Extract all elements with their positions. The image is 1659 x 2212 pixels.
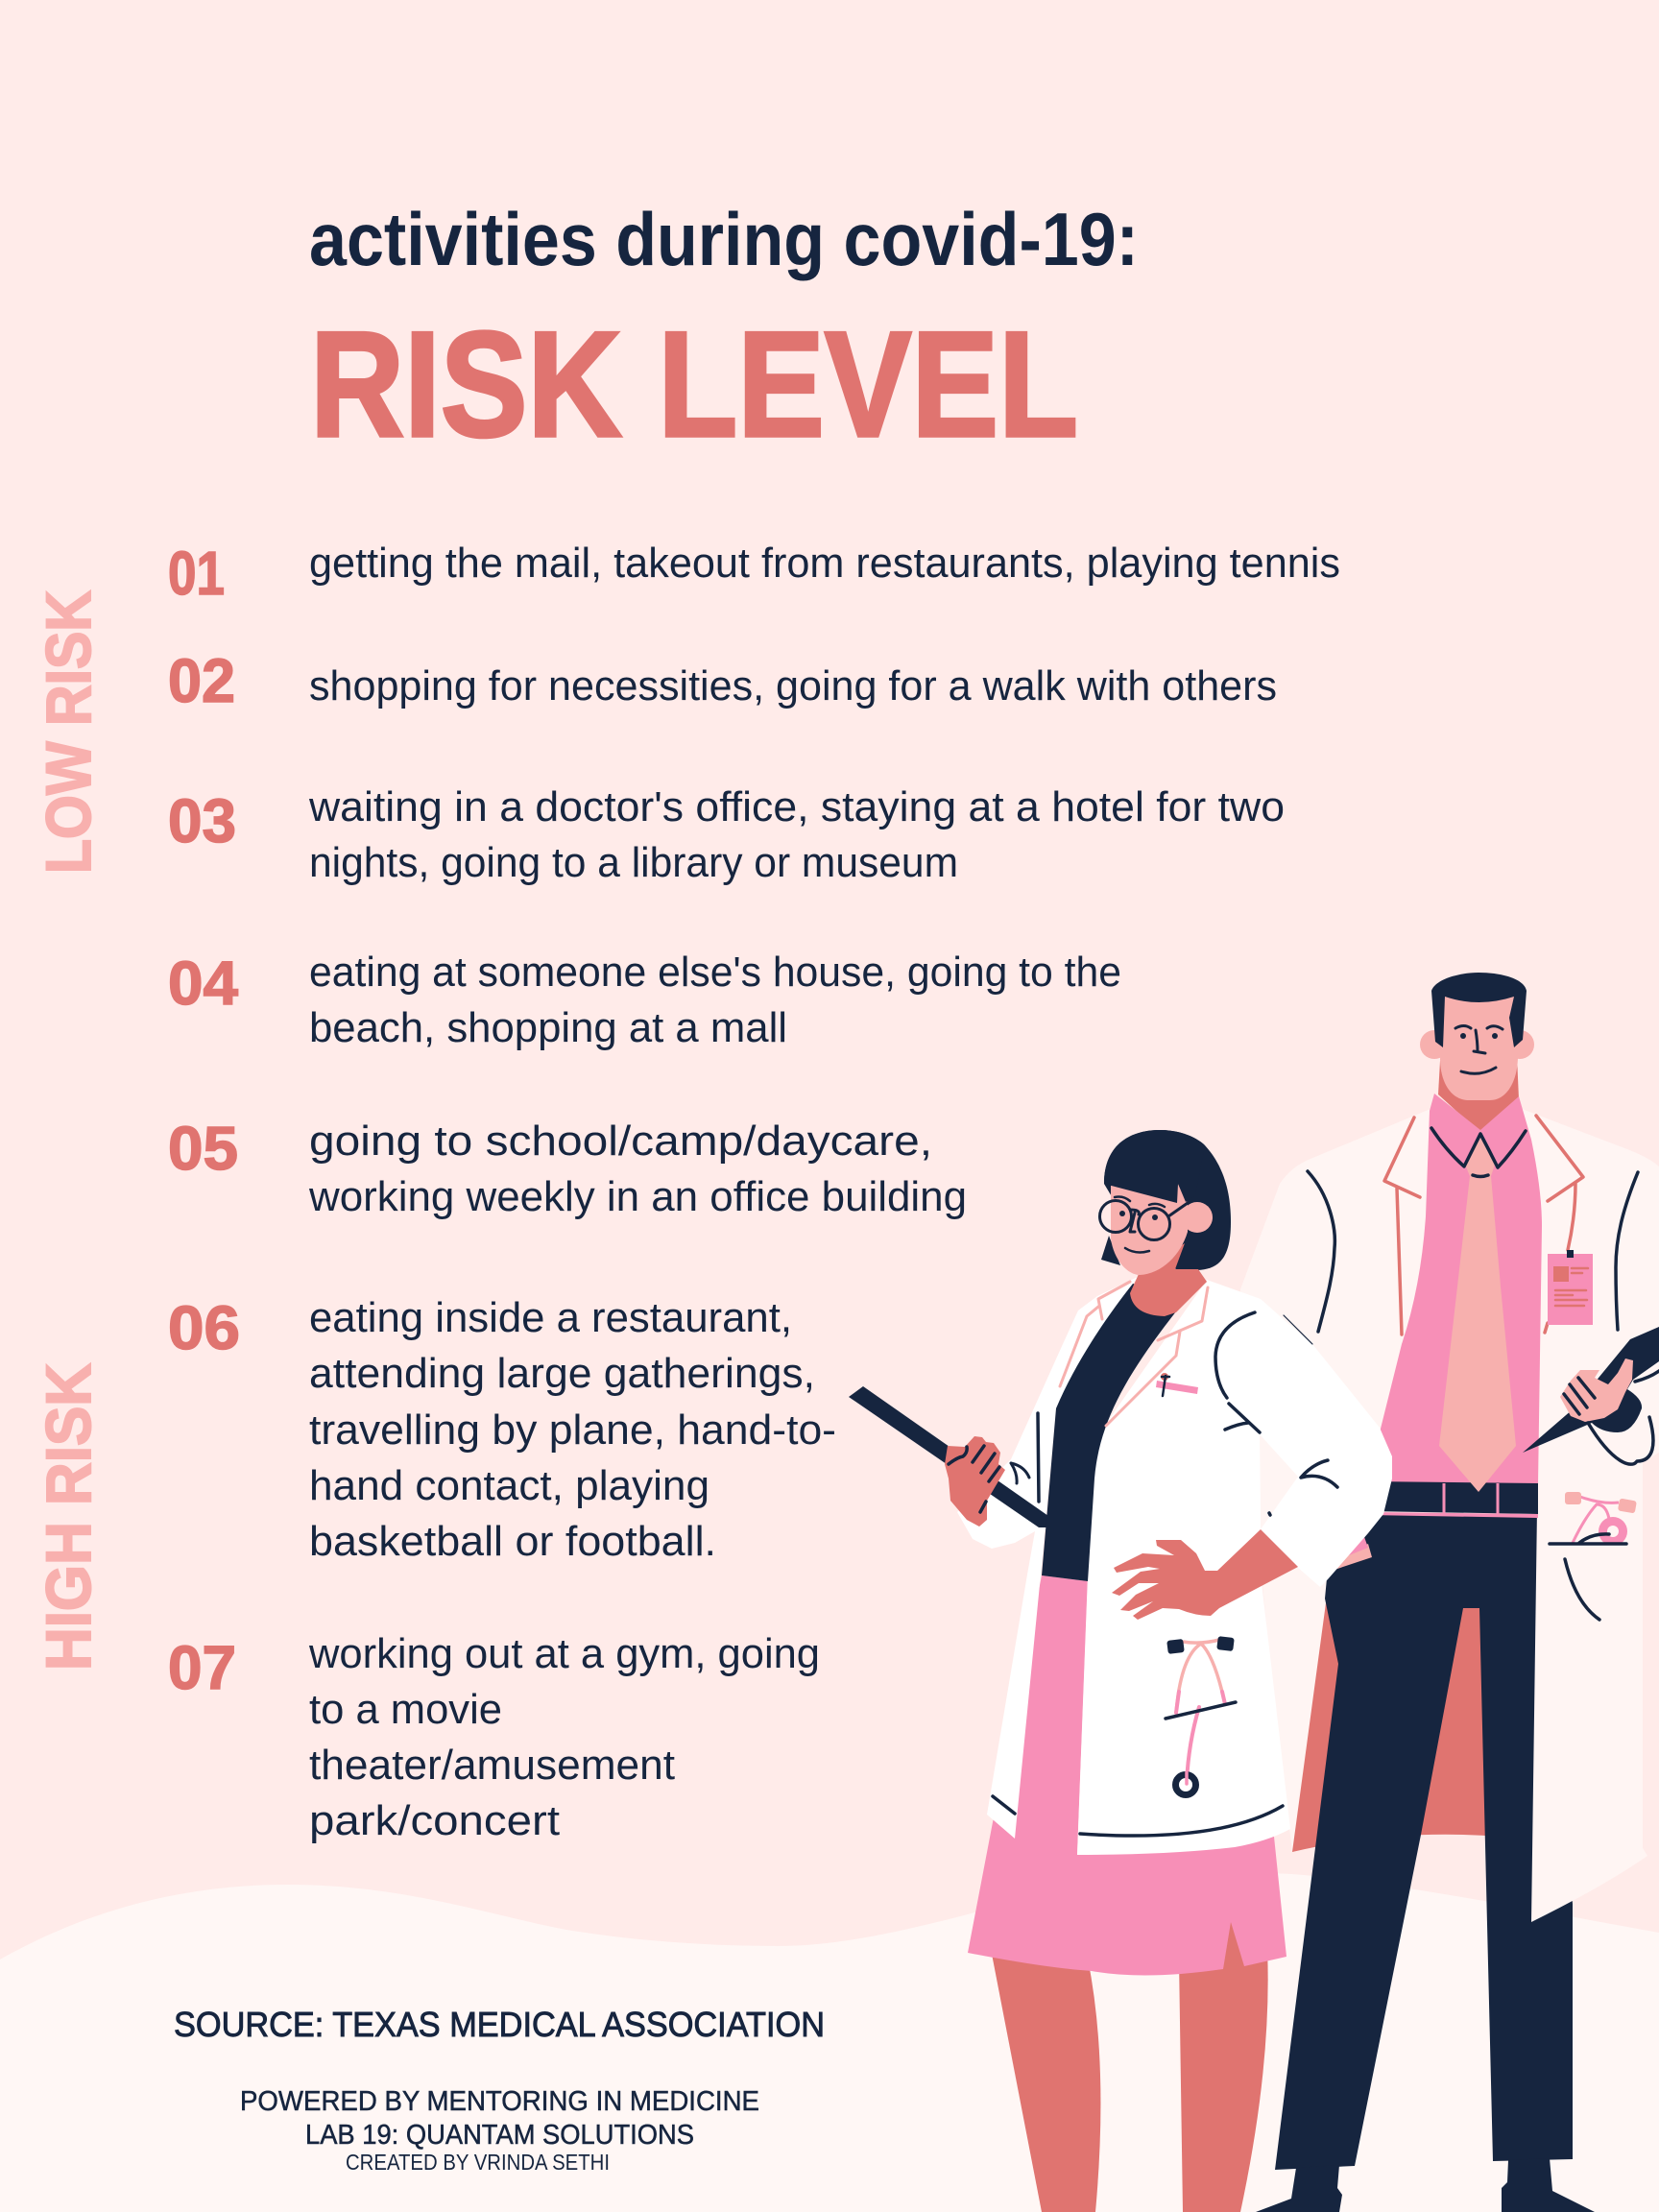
background wave (0, 1873, 1659, 2212)
credits: POWERED BY MENTORING IN MEDICINE (240, 2086, 759, 2117)
glasses (1100, 1200, 1188, 1240)
list item 01: getting the mail, takeout from restaurants, playing tennis (309, 540, 1340, 587)
credits (240, 2086, 759, 2175)
hair strand (1101, 1236, 1120, 1265)
list item 06: hand contact, playing (309, 1462, 709, 1509)
coat right panel (1077, 1280, 1296, 1855)
list item 07: theater/amusement (309, 1742, 675, 1789)
id badge (1548, 1250, 1593, 1325)
source line: SOURCE: TEXAS MEDICAL ASSOCIATION (174, 2005, 825, 2044)
list item 03: 03 (168, 786, 236, 855)
face (1440, 996, 1518, 1100)
list item 07: 07 (168, 1633, 236, 1702)
list item 06 (168, 1293, 836, 1565)
neck (1438, 1056, 1519, 1133)
list item 01: 01 (168, 539, 225, 608)
list item 06: attending large gatherings, (309, 1350, 815, 1397)
credits: CREATED BY VRINDA SETHI (346, 2150, 610, 2175)
list item 02 (168, 646, 1277, 715)
list item 07: working out at a gym, going (308, 1630, 820, 1677)
list item 03 (168, 783, 1285, 886)
forearm and hand on hip (1112, 1529, 1298, 1620)
collar lines (1431, 1128, 1526, 1177)
sleeve wrinkles (1011, 1463, 1029, 1483)
list item 04: eating at someone else's house, going to the (309, 949, 1121, 996)
pocket stethoscope (1550, 1492, 1637, 1557)
trousers (1275, 1515, 1573, 2170)
pen pocket (1156, 1373, 1198, 1396)
stethoscope (1166, 1636, 1236, 1795)
list item 07 (168, 1630, 820, 1844)
ear (1182, 1202, 1213, 1233)
coat lapels (1384, 1116, 1583, 1334)
tie (1439, 1131, 1516, 1492)
face features (1455, 1025, 1503, 1073)
coat lining (1292, 1575, 1548, 1852)
illustration: male doctor (1240, 973, 1659, 2212)
legs (991, 1920, 1268, 2212)
list item 01 (168, 539, 1340, 608)
list item 04: beach, shopping at a mall (309, 1004, 787, 1051)
list item 07: park/concert (309, 1797, 560, 1844)
shoulder crease (1284, 1315, 1312, 1344)
fringe (1104, 1130, 1205, 1203)
man's hand (1560, 1358, 1633, 1422)
belt (1368, 1481, 1538, 1518)
top (1042, 1284, 1176, 1581)
coat creases (993, 1312, 1337, 1836)
list item 05: working weekly in an office building (308, 1173, 967, 1220)
neck (1130, 1243, 1207, 1316)
skirt (968, 1575, 1286, 1976)
list item 05 (168, 1114, 967, 1220)
illustration: female doctor (849, 1130, 1392, 2212)
female face features (1115, 1196, 1165, 1252)
coat right side (1522, 1109, 1659, 1922)
credits: LAB 19: QUANTAM SOLUTIONS (305, 2120, 694, 2151)
side label: high risk: HIGH RISK (33, 1363, 104, 1671)
list item 06: travelling by plane, hand-to- (309, 1407, 836, 1454)
list item 06: 06 (168, 1293, 240, 1362)
list item 02: shopping for necessities, going for a walk with others (309, 662, 1277, 709)
list item 05: 05 (168, 1114, 238, 1183)
hair (1431, 973, 1527, 1047)
face (1111, 1184, 1188, 1275)
pointer stick (849, 1386, 1048, 1527)
arm (1207, 1280, 1392, 1587)
coat gap under arm (1261, 1435, 1298, 1529)
woman's hand on stick (945, 1436, 1005, 1527)
shirt (1373, 1094, 1542, 1485)
coat left side (1240, 1109, 1431, 1852)
list item 03: waiting in a doctor's office, staying at a hotel for two (308, 783, 1285, 830)
list item 06: eating inside a restaurant, (309, 1294, 792, 1341)
title: activities during covid-19: activities during covid-19: (309, 197, 1139, 281)
coat creases (1308, 1171, 1638, 1620)
right shoe (1502, 2158, 1595, 2212)
list item 04 (168, 949, 1121, 1051)
clipboard and sleeve cuff (1523, 1327, 1659, 1453)
ears (1420, 1030, 1534, 1059)
heading: risk level: RISK LEVEL (310, 301, 1078, 469)
arm curve (1588, 1371, 1659, 1464)
list item 04: 04 (168, 949, 238, 1018)
list item 05: going to school/camp/daycare, (309, 1118, 932, 1165)
left shoe (1256, 2165, 1342, 2212)
list item 03: nights, going to a library or museum (309, 839, 958, 886)
coat lapels (1060, 1282, 1208, 1426)
list item 02: 02 (168, 646, 235, 715)
side label: low risk: LOW RISK (33, 590, 104, 874)
coat left panel and sleeve (957, 1277, 1138, 1839)
list item 06: basketball or football. (309, 1518, 716, 1565)
list item 07: to a movie (309, 1686, 502, 1733)
hair back (1104, 1130, 1231, 1270)
shirt tail behind arm (1334, 1534, 1372, 1570)
